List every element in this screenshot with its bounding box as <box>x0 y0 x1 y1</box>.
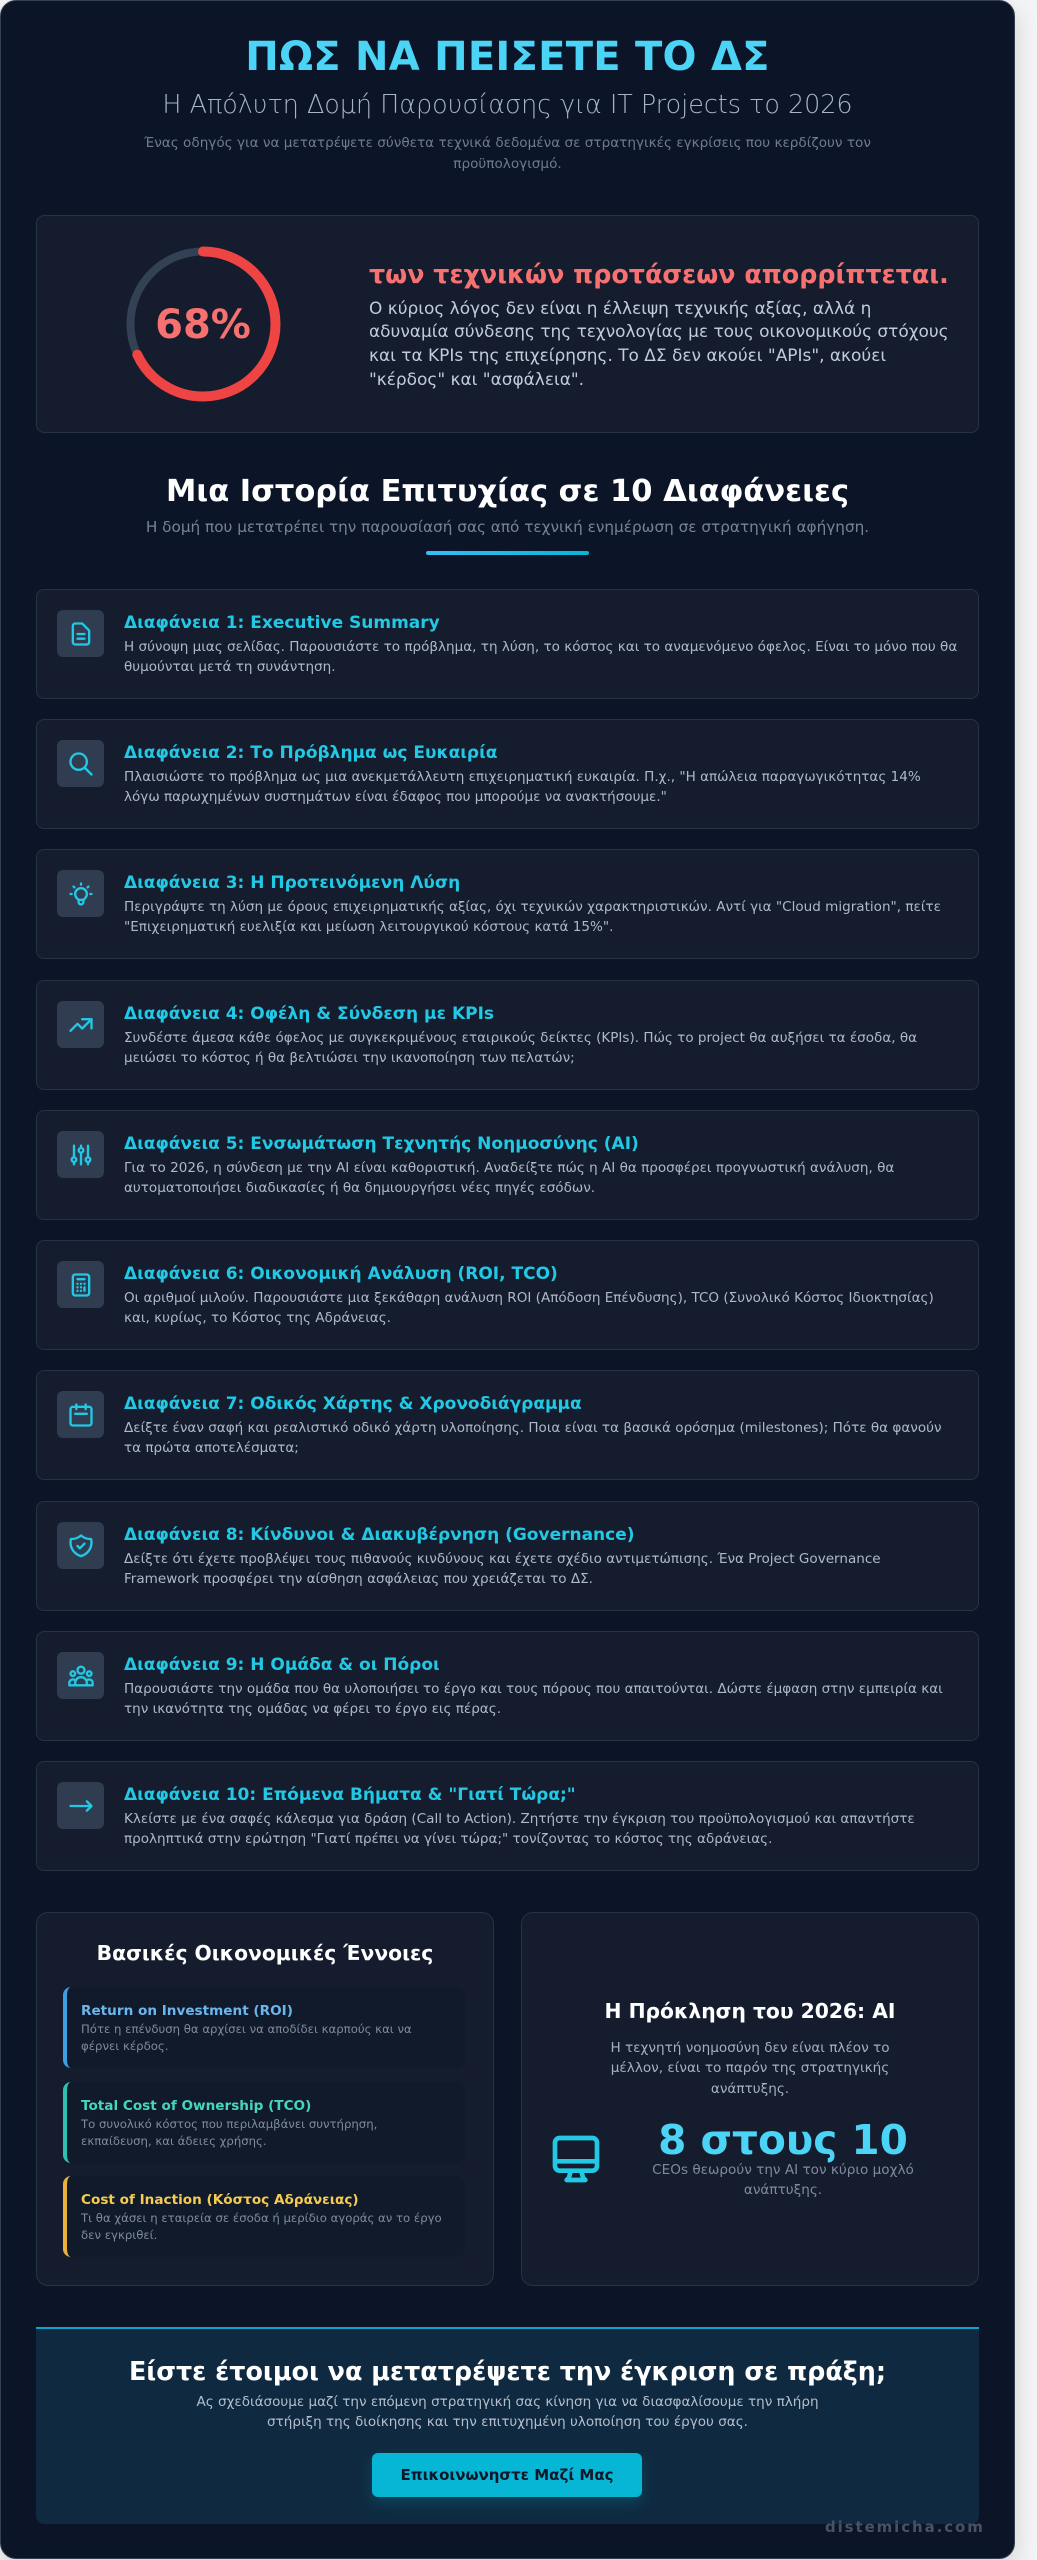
tagline: Ένας οδηγός για να μετατρέψετε σύνθετα τεχνικά δεδομένα σε στρατηγικές εγκρίσεις που κερδίζουν τον <box>144 135 871 151</box>
CTA text <box>196 2394 819 2430</box>
icon: adjustments <box>57 1131 104 1178</box>
card text: Κλείστε με ένα σαφές κάλεσμα για δράση (Call to Action). Ζητήστε την έγκριση του προϋπολογισμού και απαντήστε <box>124 1811 915 1827</box>
stat explanation: και τα KPIs της επιχείρησης. Το ΔΣ δεν ακούει "APIs", ακούει <box>369 345 886 365</box>
card text <box>124 1811 915 1847</box>
card text: θυμούνται μετά τη συνάντηση. <box>124 659 336 675</box>
title: ΠΩΣ ΝΑ ΠΕΙΣΕΤΕ ΤΟ ΔΣ <box>245 34 770 80</box>
card text <box>124 639 957 675</box>
concept: cost of inaction <box>63 2176 465 2257</box>
stat caption: CEOs θεωρούν την AI τον κύριο μοχλό <box>652 2162 914 2178</box>
slide card 1 <box>36 589 979 699</box>
icon: shield check <box>57 1522 104 1569</box>
concept: TCO: Το συνολικό κόστος που περιλαμβάνει συντήρηση, <box>81 2117 377 2131</box>
concept: ROI: φέρνει κέρδος. <box>81 2039 168 2053</box>
icon: calculator <box>57 1261 104 1308</box>
tagline: προϋπολογισμό. <box>453 156 562 172</box>
concept: TCO <box>63 2082 465 2163</box>
card text: Δείξτε έναν σαφή και ρεαλιστικό οδικό χάρτη υλοποίησης. Ποια είναι τα βασικά ορόσημα (milestones); Πότε θα φανούν <box>124 1420 942 1436</box>
card text: "Επιχειρηματική ευελιξία και μείωση λειτουργικού κόστους κατά 15%". <box>124 919 613 935</box>
slide card 6 <box>36 1240 979 1350</box>
AI challenge text <box>610 2040 890 2097</box>
panel: AI challenge <box>521 1912 979 2286</box>
stat explanation: "κέρδος" και "ασφάλεια". <box>369 369 584 389</box>
stat caption <box>652 2162 914 2198</box>
card title: Διαφάνεια 1: Executive Summary <box>124 612 440 632</box>
donut chart: 68% <box>126 246 280 402</box>
icon: search <box>57 740 104 787</box>
stat caption: ανάπτυξης. <box>744 2182 822 2198</box>
card text <box>124 899 941 935</box>
card title: Διαφάνεια 7: Οδικός Χάρτης & Χρονοδιάγραμμα <box>124 1394 582 1414</box>
card title: Διαφάνεια 8: Κίνδυνοι & Διακυβέρνηση (Governance) <box>124 1524 635 1544</box>
card text <box>124 1551 881 1587</box>
card text: προληπτικά στην ερώτηση "Γιατί πρέπει να γίνει τώρα;" τονίζοντας το κόστος της αδράνειας. <box>124 1831 772 1847</box>
CTA button: Επικοινωνηστε Μαζί Μας <box>400 2466 614 2484</box>
stat explanation: αδυναμία σύνδεσης της τεχνολογίας με τους οικονομικούς στόχους <box>369 321 949 341</box>
slide card 5 <box>36 1110 979 1220</box>
concept: TCO: εκπαίδευση, και άδειες χρήσης. <box>81 2134 267 2148</box>
slide card 10 <box>36 1761 979 1871</box>
card text: αυτοματοποιήσει διαδικασίες ή θα δημιουργήσει νέες πηγές εσόδων. <box>124 1180 595 1196</box>
card text <box>124 1290 934 1326</box>
panel: 68% statistic <box>36 215 979 433</box>
concept: ROI: Πότε η επένδυση θα αρχίσει να αποδίδει καρπούς και να <box>81 2022 412 2036</box>
card title: Διαφάνεια 5: Ενσωμάτωση Τεχνητής Νοημοσύνης (AI) <box>124 1134 639 1154</box>
icon: team <box>57 1652 104 1699</box>
section subtitle: Η δομή που μετατρέπει την παρουσίασή σας από τεχνική ενημέρωση σε στρατηγική αφήγηση. <box>146 518 869 536</box>
stat: 8 in 10: 8 στους 10 <box>658 2116 908 2164</box>
concept: ROI: Return on Investment (ROI) <box>81 2003 293 2019</box>
slide card 8 <box>36 1501 979 1611</box>
card text: Συνδέστε άμεσα κάθε όφελος με συγκεκριμένους εταιρικούς δείκτες (KPIs). Πώς το project θα αυξήσει τα έσοδα, θα <box>124 1030 917 1046</box>
watermark: distemicha.com <box>825 2518 985 2536</box>
donut chart: 68%: 68% <box>155 302 251 348</box>
card text: Οι αριθμοί μιλούν. Παρουσιάστε μια ξεκάθαρη ανάλυση ROI (Απόδοση Επένδυσης), TCO (Συνολικό Κόστος Ιδιοκτησίας) <box>124 1290 934 1306</box>
card text: τα πρώτα αποτελέσματα; <box>124 1440 299 1456</box>
tagline <box>144 135 871 172</box>
slide card 3 <box>36 849 979 959</box>
card text <box>124 1420 942 1456</box>
subtitle: Η Απόλυτη Δομή Παρουσίασης για IT Projects το 2026 <box>162 89 853 119</box>
AI challenge text: ανάπτυξης. <box>711 2081 789 2097</box>
icon: trending up <box>57 1001 104 1048</box>
card text <box>124 1681 943 1717</box>
panel: financial concepts <box>36 1912 494 2286</box>
card text: Περιγράψτε τη λύση με όρους επιχειρηματικής αξίας, όχι τεχνικών χαρακτηριστικών. Αντί για "Cloud migration", πείτε <box>124 899 941 915</box>
icon: light bulb <box>57 870 104 917</box>
card text: Η σύνοψη μιας σελίδας. Παρουσιάστε το πρόβλημα, τη λύση, το κόστος και το αναμενόμενο όφελος. Είναι το μόνο που θα <box>124 639 957 655</box>
concept: cost of inaction: Cost of Inaction (Κόστος Αδράνειας) <box>81 2192 359 2208</box>
call to action panel <box>36 2327 979 2524</box>
icon: computer monitor <box>552 2136 600 2182</box>
card text: Δείξτε ότι έχετε προβλέψει τους πιθανούς κινδύνους και έχετε σχέδιο αντιμετώπισης. Ένα Project Governance <box>124 1551 881 1567</box>
slide card 7 <box>36 1370 979 1480</box>
slide card 2 <box>36 719 979 829</box>
CTA heading: Είστε έτοιμοι να μετατρέψετε την έγκριση σε πράξη; <box>129 2356 886 2386</box>
card title: Διαφάνεια 10: Επόμενα Βήματα & "Γιατί Τώρα;" <box>124 1784 576 1804</box>
icon: arrow right <box>57 1782 104 1829</box>
AI challenge text: Η τεχνητή νοημοσύνη δεν είναι πλέον το <box>610 2040 890 2056</box>
card text: λόγω παρωχημένων συστημάτων είναι έδαφος που μπορούμε να ανακτήσουμε." <box>124 789 667 805</box>
card text <box>124 769 921 805</box>
card text <box>124 1030 917 1066</box>
card title: Διαφάνεια 4: Οφέλη & Σύνδεση με KPIs <box>124 1004 494 1024</box>
card text: μειώσει το κόστος ή θα βελτιώσει την ικανοποίηση των πελατών; <box>124 1050 575 1066</box>
card text: Πλαισιώστε το πρόβλημα ως μια ανεκμετάλλευτη επιχειρηματική ευκαιρία. Π.χ., "Η απώλεια παραγωγικότητας 14% <box>124 769 921 785</box>
card text: Παρουσιάστε την ομάδα που θα υλοποιήσει το έργο και τους πόρους που απαιτούνται. Δώστε έμφαση στην εμπειρία και <box>124 1681 943 1697</box>
heading divider <box>426 551 589 555</box>
stat explanation: Ο κύριος λόγος δεν είναι η έλλειψη τεχνικής αξίας, αλλά η <box>369 298 871 318</box>
slide card 4 <box>36 980 979 1090</box>
icon: calendar <box>57 1391 104 1438</box>
card title: Διαφάνεια 9: Η Ομάδα & οι Πόροι <box>124 1654 440 1674</box>
concept: cost of inaction: δεν εγκριθεί. <box>81 2228 157 2242</box>
AI challenge heading: Η Πρόκληση του 2026: AI <box>605 1999 895 2023</box>
CTA text: στήριξη της διοίκησης και την επιτυχημένη υλοποίηση του έργου σας. <box>267 2414 748 2430</box>
card text: την ικανότητα της ομάδας να φέρει το έργο εις πέρας. <box>124 1701 501 1717</box>
concept: ROI <box>63 1987 465 2068</box>
card title: Διαφάνεια 6: Οικονομική Ανάλυση (ROI, TCO) <box>124 1264 558 1284</box>
concept: cost of inaction: Τι θα χάσει η εταιρεία σε έσοδα ή μερίδιο αγοράς αν το έργο <box>81 2211 442 2225</box>
card text: και, κυρίως, το Κόστος της Αδράνειας. <box>124 1310 391 1326</box>
CTA button <box>372 2453 642 2497</box>
card title: Διαφάνεια 2: Το Πρόβλημα ως Ευκαιρία <box>124 742 497 762</box>
card text: Για το 2026, η σύνδεση με την AI είναι καθοριστική. Αναδείξτε πώς η AI θα προσφέρει προγνωστική ανάλυση, θα <box>124 1160 894 1176</box>
CTA text: Ας σχεδιάσουμε μαζί την επόμενη στρατηγική σας κίνηση για να διασφαλίσουμε την πλήρη <box>196 2394 819 2410</box>
stat explanation <box>369 298 949 389</box>
card text <box>124 1160 894 1196</box>
financial concepts heading: Βασικές Οικονομικές Έννοιες <box>97 1941 433 1965</box>
stat heading: των τεχνικών προτάσεων απορρίπτεται. <box>369 258 949 288</box>
AI challenge text: μέλλον, είναι το παρόν της στρατηγικής <box>611 2060 889 2076</box>
slide card 9 <box>36 1631 979 1741</box>
section heading: Μια Ιστορία Επιτυχίας σε 10 Διαφάνειες <box>166 474 849 509</box>
concept: TCO: Total Cost of Ownership (TCO) <box>81 2098 311 2114</box>
card title: Διαφάνεια 3: Η Προτεινόμενη Λύση <box>124 872 460 892</box>
icon: document <box>57 610 104 657</box>
card text: Framework προσφέρει την αίσθηση ασφάλειας που χρειάζεται το ΔΣ. <box>124 1571 593 1587</box>
